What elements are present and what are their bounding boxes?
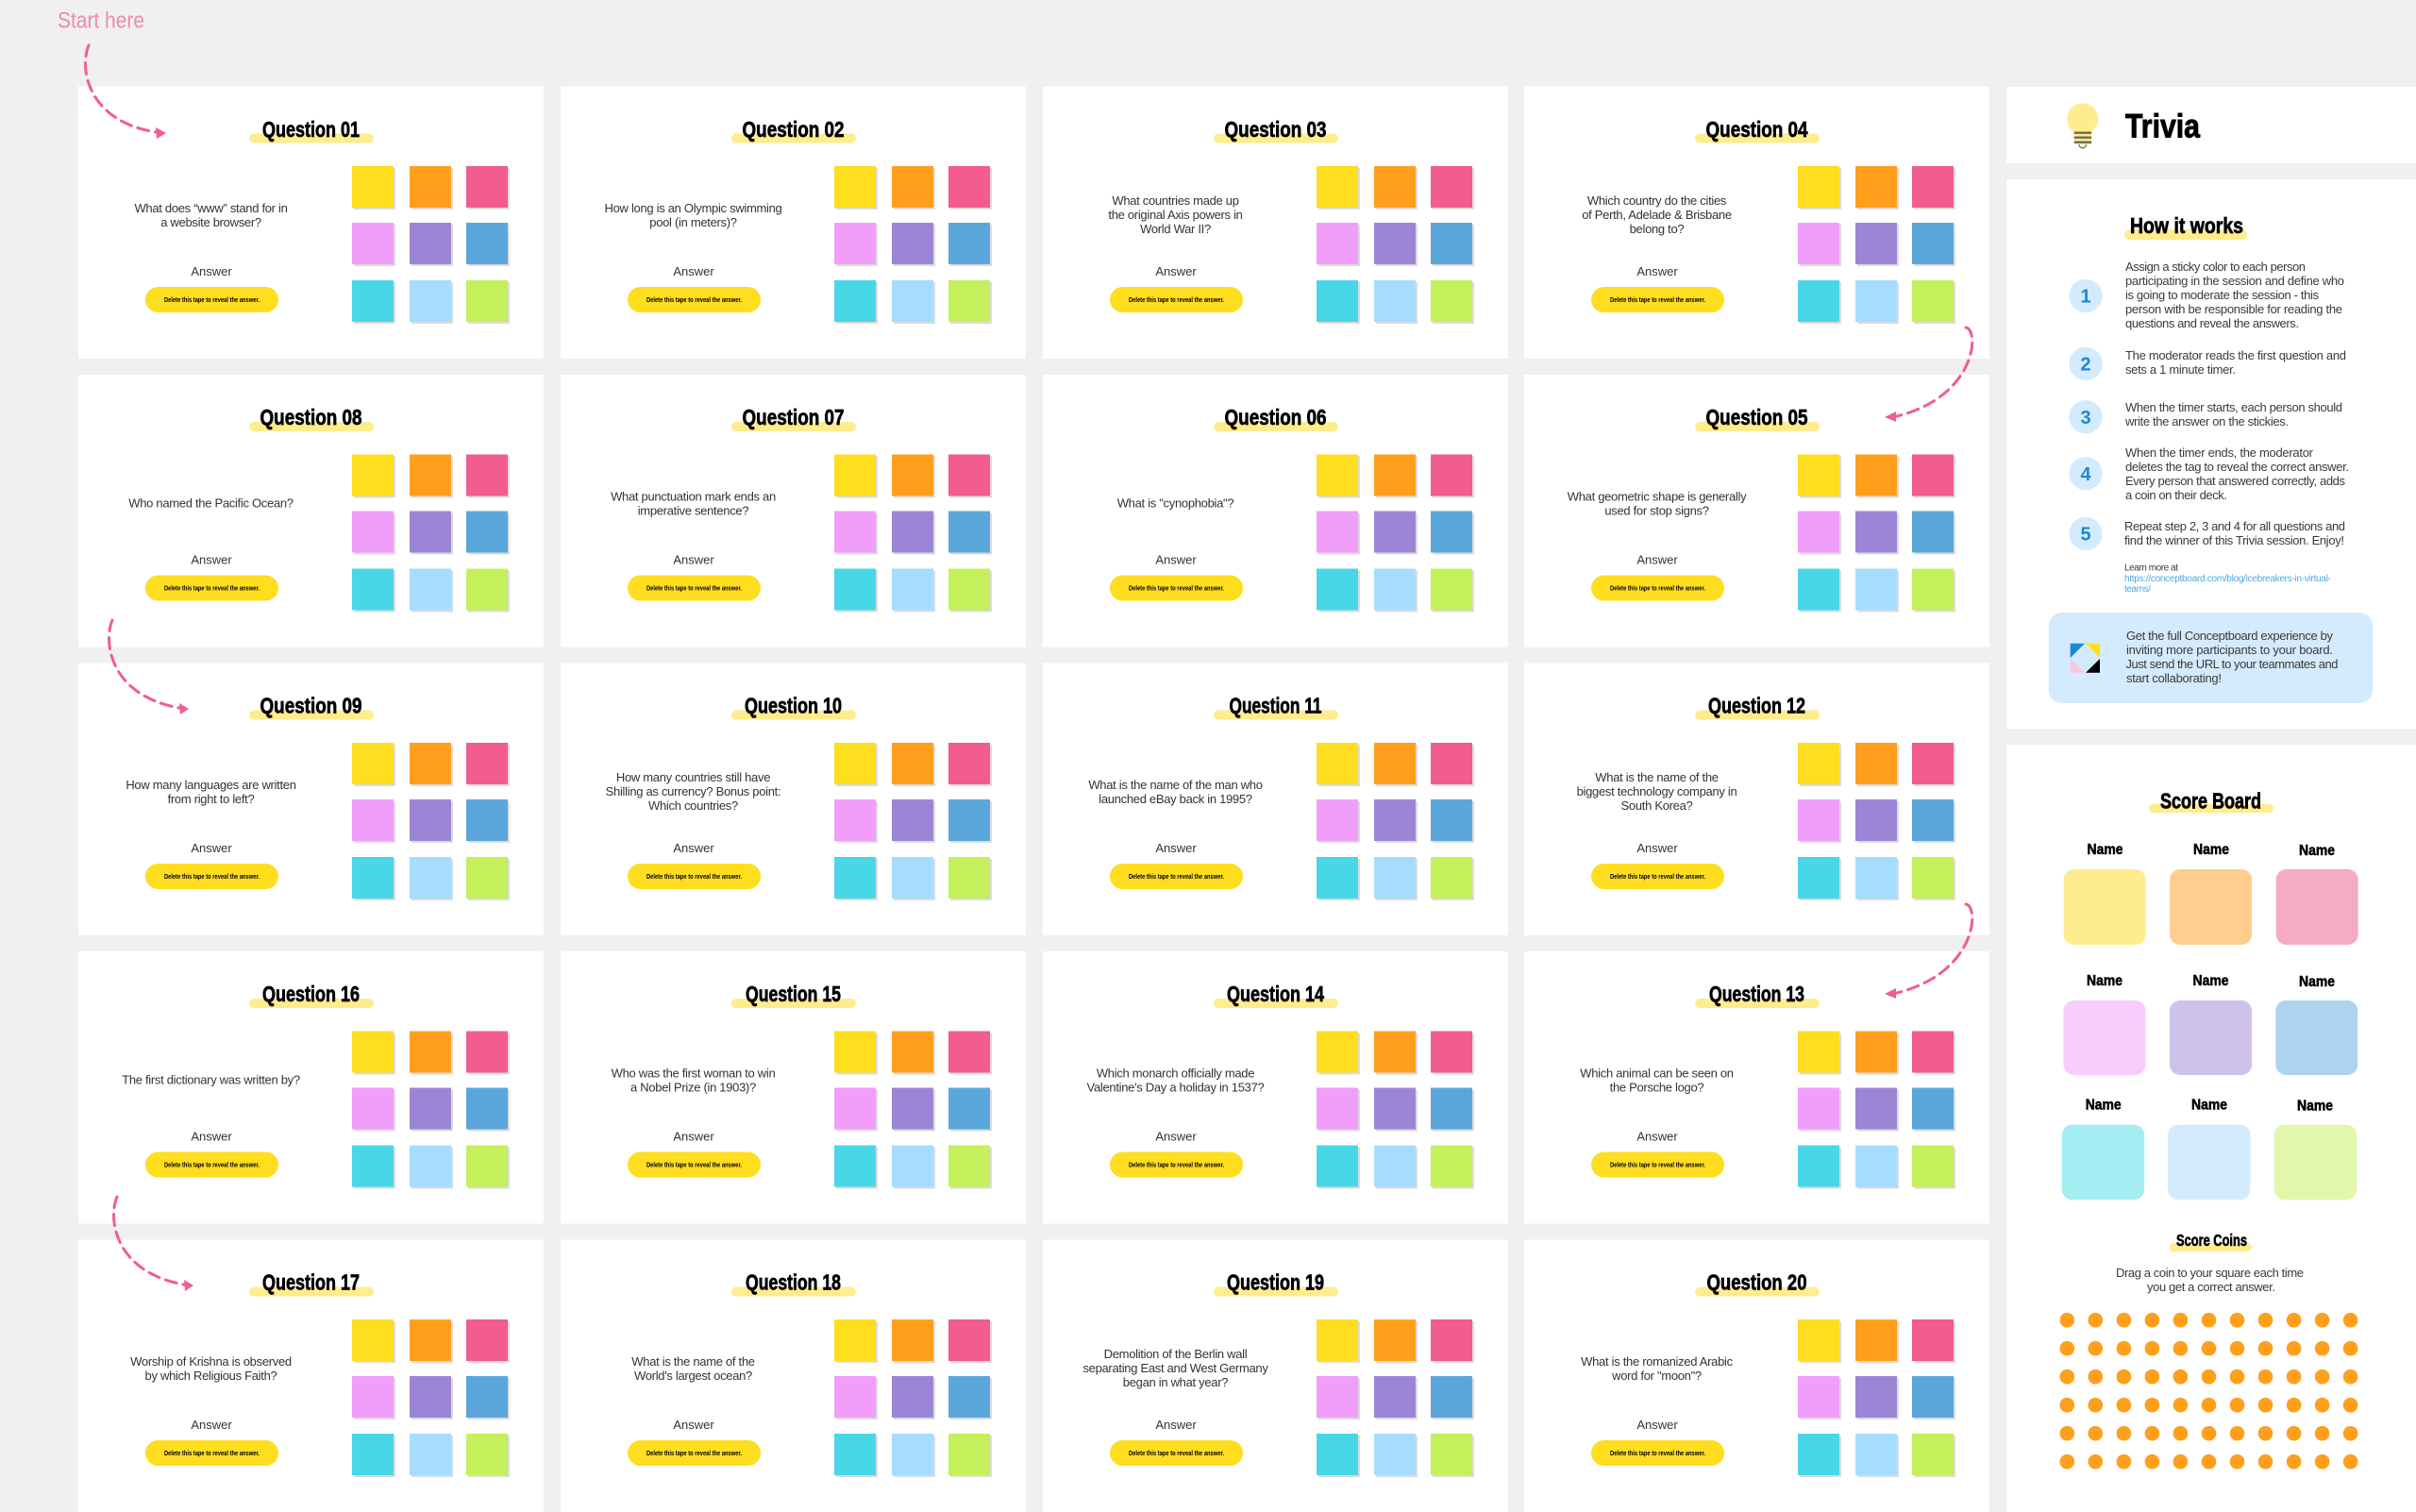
question text: Demolition of the Berlin wall — [1104, 1347, 1248, 1361]
answer label: Answer — [191, 553, 232, 566]
score square 8 — [2168, 1098, 2250, 1200]
question text: by which Religious Faith? — [145, 1369, 277, 1383]
sticky notes — [1798, 1319, 1955, 1477]
heading: trivia: Trivia — [2125, 109, 2200, 145]
panel: how it works — [2006, 179, 2416, 729]
question text: What geometric shape is generally — [1568, 489, 1747, 504]
question text: Worship of Krishna is observed — [130, 1354, 292, 1369]
panel: question 16 — [78, 951, 544, 1223]
question text: What is the name of the — [1595, 770, 1719, 784]
step 2: The moderator reads the first question and — [2125, 348, 2346, 362]
tape — [1591, 1151, 1724, 1178]
step 2 — [2069, 347, 2346, 380]
step 4: Every person that answered correctly, adds — [2125, 474, 2346, 488]
tape: Delete this tape to reveal the answer. — [1610, 295, 1705, 304]
question text: a Nobel Prize (in 1903)? — [630, 1080, 756, 1095]
answer label: Answer — [191, 841, 232, 855]
tape: Delete this tape to reveal the answer. — [646, 295, 742, 304]
answer label: Answer — [191, 1129, 232, 1144]
answer label: Answer — [673, 553, 714, 566]
tape: Delete this tape to reveal the answer. — [646, 872, 742, 881]
learn more link — [2124, 563, 2331, 595]
score square 1 — [2064, 842, 2146, 945]
tape: Delete this tape to reveal the answer. — [646, 583, 742, 593]
answer label: Answer — [1636, 264, 1678, 278]
tape — [628, 1440, 761, 1466]
step 4: deletes the tag to reveal the correct answer. — [2125, 460, 2349, 474]
callout: invite participants — [2049, 613, 2373, 703]
tape — [628, 287, 761, 312]
step 1: participating in the session and define who — [2125, 274, 2344, 288]
heading: question 03: Question 03 — [1225, 117, 1327, 142]
sticky notes — [352, 166, 510, 324]
tape: Delete this tape to reveal the answer. — [1129, 1449, 1224, 1457]
tape — [145, 576, 278, 600]
question text: from right to left? — [168, 792, 254, 806]
tape — [1591, 864, 1724, 889]
tape: Delete this tape to reveal the answer. — [1129, 1161, 1224, 1168]
tape — [1110, 1151, 1243, 1178]
callout: invite participants: Get the full Conceptboard experience by — [2126, 629, 2333, 643]
panel: question 13 — [1524, 951, 1989, 1223]
score square 6: Name — [2299, 974, 2335, 990]
score square 2 — [2170, 842, 2252, 945]
learn more link: Learn more at — [2124, 563, 2178, 574]
sticky notes — [834, 1319, 992, 1477]
step 1: 1 — [2080, 287, 2091, 308]
question text: Valentine's Day a holiday in 1537? — [1087, 1080, 1265, 1095]
heading: question 16: Question 16 — [262, 982, 360, 1006]
icon: light bulb — [2067, 103, 2098, 148]
question text: World War II? — [1140, 222, 1211, 236]
panel: question 02 — [561, 87, 1026, 359]
step 3: write the answer on the stickies. — [2124, 414, 2289, 428]
question text: biggest technology company in — [1577, 784, 1736, 798]
step 5 — [2069, 517, 2345, 550]
heading: question 04: Question 04 — [1706, 117, 1808, 142]
heading: question 07: Question 07 — [742, 405, 844, 429]
question text: Which animal can be seen on — [1580, 1067, 1734, 1080]
sticky notes — [1317, 1319, 1474, 1477]
question text: belong to? — [1630, 222, 1684, 236]
question text: How long is an Olympic swimming — [605, 201, 782, 215]
learn more link: teams/ — [2124, 584, 2151, 595]
score square 1: Name — [2088, 842, 2123, 858]
heading: question 05: Question 05 — [1706, 405, 1808, 429]
step 1: questions and reveal the answers. — [2125, 316, 2299, 330]
tape — [145, 1440, 278, 1466]
arrow: question 16 to question 17 — [114, 1197, 193, 1291]
panel: title — [2006, 87, 2416, 163]
step 3: 3 — [2080, 408, 2091, 428]
answer label: Answer — [1636, 1418, 1678, 1432]
question text: How many countries still have — [616, 770, 770, 784]
callout: invite participants: start collaborating! — [2126, 671, 2222, 685]
sticky notes — [352, 1031, 510, 1189]
tape: Delete this tape to reveal the answer. — [164, 583, 260, 593]
tape — [1110, 864, 1243, 889]
answer label: Answer — [1636, 841, 1678, 855]
answer label: Answer — [1155, 264, 1197, 278]
answer label: Answer — [191, 264, 232, 278]
step 3: When the timer starts, each person should — [2125, 400, 2342, 414]
panel: question 12 — [1524, 663, 1989, 935]
question text: Who was the first woman to win — [612, 1067, 775, 1080]
tape — [145, 864, 278, 889]
question text: used for stop signs? — [1604, 504, 1709, 517]
answer label: Answer — [673, 264, 714, 278]
score square 4: Name — [2087, 973, 2122, 989]
tape: Delete this tape to reveal the answer. — [1610, 1449, 1705, 1457]
step 4: 4 — [2080, 464, 2091, 485]
score square 3 — [2276, 843, 2358, 945]
panel: question 11 — [1043, 663, 1508, 935]
tape — [1110, 287, 1243, 312]
tape — [628, 576, 761, 600]
coin instructions: you get a correct answer. — [2147, 1280, 2275, 1294]
heading: question 08: Question 08 — [260, 405, 362, 429]
sticky notes — [834, 455, 992, 612]
question text: What is "cynophobia"? — [1117, 496, 1233, 510]
question text: began in what year? — [1123, 1375, 1228, 1389]
answer label: Answer — [1155, 1129, 1197, 1144]
heading: question 02: Question 02 — [742, 117, 844, 142]
question text: The first dictionary was written by? — [122, 1072, 300, 1087]
arrow: question 12 to question 13 — [1885, 904, 1972, 999]
tape — [628, 864, 761, 889]
step 1: Assign a sticky color to each person — [2125, 260, 2306, 274]
panel: question 19 — [1043, 1240, 1508, 1512]
panel: question 03 — [1043, 87, 1508, 359]
question text: Shilling as currency? Bonus point: — [606, 784, 780, 798]
heading: question 15: Question 15 — [746, 982, 841, 1006]
sticky notes — [352, 455, 510, 612]
sticky notes — [352, 1319, 510, 1477]
panel: question 18 — [561, 1240, 1026, 1512]
panel: question 07 — [561, 375, 1026, 647]
score square 4 — [2063, 973, 2146, 1075]
step 1: person with be responsible for reading the — [2125, 302, 2342, 316]
question text: the Porsche logo? — [1610, 1080, 1703, 1095]
question text: Who named the Pacific Ocean? — [128, 496, 294, 510]
panel: question 10 — [561, 663, 1026, 935]
heading: question 11: Question 11 — [1229, 693, 1322, 717]
question text: World's largest ocean? — [634, 1369, 752, 1383]
sticky notes — [1798, 743, 1955, 900]
panel: question 14 — [1043, 951, 1508, 1223]
panel: question 15 — [561, 951, 1026, 1223]
score square 3: Name — [2299, 843, 2335, 859]
heading: question 09: Question 09 — [260, 693, 362, 717]
question text: What punctuation mark ends an — [611, 489, 776, 504]
start here label: Start here — [58, 8, 144, 34]
step 4: When the timer ends, the moderator — [2125, 445, 2314, 460]
heading: question 12: Question 12 — [1708, 693, 1805, 717]
question text: Which country do the cities — [1587, 193, 1727, 208]
tape — [145, 1151, 278, 1178]
score square 2: Name — [2193, 842, 2229, 858]
answer label: Answer — [1636, 553, 1678, 566]
panel: question 06 — [1043, 375, 1508, 647]
score square 5: Name — [2193, 973, 2229, 989]
heading: question 17: Question 17 — [262, 1270, 360, 1295]
question text: What is the romanized Arabic — [1581, 1354, 1734, 1369]
sticky notes — [834, 1031, 992, 1189]
question text: South Korea? — [1621, 798, 1693, 813]
tape — [1591, 287, 1724, 312]
sticky notes — [1798, 455, 1955, 612]
tape: Delete this tape to reveal the answer. — [1129, 583, 1224, 593]
question text: Which countries? — [648, 798, 738, 813]
sticky notes — [1317, 455, 1474, 612]
step 3 — [2069, 400, 2342, 433]
score square 6 — [2275, 974, 2357, 1075]
tape — [1110, 1440, 1243, 1466]
callout: invite participants: Just send the URL to your teammates and — [2125, 657, 2339, 671]
sticky notes — [1798, 1031, 1955, 1189]
tape — [628, 1151, 761, 1178]
answer label: Answer — [1155, 841, 1197, 855]
panel: question 09 — [78, 663, 544, 935]
score square 7: Name — [2086, 1098, 2122, 1114]
heading: score coins: Score Coins — [2176, 1231, 2247, 1250]
sticky notes — [1317, 1031, 1474, 1189]
heading: question 06: Question 06 — [1225, 405, 1327, 429]
tape: Delete this tape to reveal the answer. — [1129, 295, 1224, 304]
panel: question 20 — [1524, 1240, 1989, 1512]
heading: question 14: Question 14 — [1227, 982, 1324, 1006]
question text: What does “www” stand for in — [134, 201, 288, 215]
step 2: sets a 1 minute timer. — [2125, 362, 2236, 377]
arrow: question 04 to question 05 — [1885, 328, 1972, 422]
question text: What is the name of the — [631, 1354, 755, 1369]
tape: Delete this tape to reveal the answer. — [164, 872, 260, 881]
tape: Delete this tape to reveal the answer. — [164, 1161, 260, 1168]
heading: question 10: Question 10 — [745, 693, 842, 717]
arrow: start to question 01 — [86, 45, 166, 139]
question text: of Perth, Adelade & Brisbane — [1582, 208, 1732, 222]
answer label: Answer — [1155, 1418, 1197, 1432]
sticky notes — [834, 743, 992, 900]
tape — [1591, 576, 1724, 600]
sticky notes — [1798, 166, 1955, 324]
sticky notes — [1317, 743, 1474, 900]
step 5: 5 — [2080, 525, 2091, 546]
heading: how it works: How it works — [2130, 213, 2243, 238]
tape: Delete this tape to reveal the answer. — [1610, 1161, 1705, 1168]
score coins grid — [2059, 1313, 2357, 1469]
learn more link: https://conceptboard.com/blog/icebreakers-in-virtual- — [2124, 574, 2331, 584]
answer label: Answer — [191, 1418, 232, 1432]
step 4: a coin on their deck. — [2125, 488, 2227, 502]
question text: How many languages are written — [126, 778, 296, 792]
heading: question 19: Question 19 — [1227, 1270, 1324, 1295]
score square 9: Name — [2297, 1099, 2333, 1115]
icon: conceptboard logo — [2071, 644, 2100, 673]
question text: pool (in meters)? — [649, 215, 737, 229]
panel: question 05 — [1524, 375, 1989, 647]
answer label: Answer — [673, 1418, 714, 1432]
answer label: Answer — [673, 1129, 714, 1144]
tape — [145, 287, 278, 312]
tape: Delete this tape to reveal the answer. — [164, 1449, 260, 1457]
sticky notes — [1317, 166, 1474, 324]
score square 7 — [2062, 1098, 2144, 1200]
heading: score coins — [2170, 1231, 2252, 1252]
tape: Delete this tape to reveal the answer. — [164, 295, 260, 304]
score square 8: Name — [2191, 1098, 2227, 1114]
question text: launched eBay back in 1995? — [1099, 792, 1252, 806]
question text: What countries made up — [1112, 193, 1239, 208]
question text: a website browser? — [160, 215, 261, 229]
panel: question 04 — [1524, 87, 1989, 359]
tape: Delete this tape to reveal the answer. — [1610, 583, 1705, 593]
step 1: is going to moderate the session - this — [2125, 288, 2320, 302]
panel: score board — [2006, 745, 2416, 1512]
tape — [1110, 576, 1243, 600]
coin instructions: Drag a coin to your square each time — [2116, 1266, 2304, 1280]
score square 9 — [2274, 1099, 2357, 1200]
heading: question 20: Question 20 — [1706, 1270, 1806, 1295]
step 5: Repeat step 2, 3 and 4 for all questions and — [2124, 519, 2345, 533]
sticky notes — [352, 743, 510, 900]
answer label: Answer — [1636, 1129, 1678, 1144]
step 5: find the winner of this Trivia session. Enjoy! — [2124, 533, 2344, 547]
question text: separating East and West Germany — [1082, 1361, 1268, 1375]
panel: question 08 — [78, 375, 544, 647]
sticky notes — [834, 166, 992, 324]
tape: Delete this tape to reveal the answer. — [646, 1161, 742, 1168]
question text: What is the name of the man who — [1088, 778, 1263, 792]
tape: Delete this tape to reveal the answer. — [646, 1449, 742, 1457]
question text: word for "moon"? — [1611, 1369, 1702, 1383]
question text: the original Axis powers in — [1108, 208, 1243, 222]
question text: imperative sentence? — [638, 504, 748, 517]
callout: invite participants: inviting more participants to your board. — [2126, 643, 2333, 657]
step 4 — [2069, 445, 2349, 502]
heading: question 01: Question 01 — [262, 117, 360, 142]
question text: Which monarch officially made — [1097, 1067, 1254, 1080]
tape: Delete this tape to reveal the answer. — [1610, 872, 1705, 881]
tape: Delete this tape to reveal the answer. — [1129, 872, 1224, 881]
heading: question 18: Question 18 — [746, 1270, 841, 1295]
answer label: Answer — [1155, 553, 1197, 566]
arrow: question 08 to question 09 — [109, 620, 189, 714]
heading: question 13: Question 13 — [1709, 982, 1804, 1006]
heading: score board: Score Board — [2160, 789, 2261, 814]
step 2: 2 — [2080, 355, 2091, 376]
answer label: Answer — [673, 841, 714, 855]
panel: question 01 — [78, 87, 544, 359]
panel: question 17 — [78, 1240, 544, 1512]
score square 5 — [2170, 973, 2252, 1075]
step 1 — [2069, 260, 2344, 330]
tape — [1591, 1440, 1724, 1466]
